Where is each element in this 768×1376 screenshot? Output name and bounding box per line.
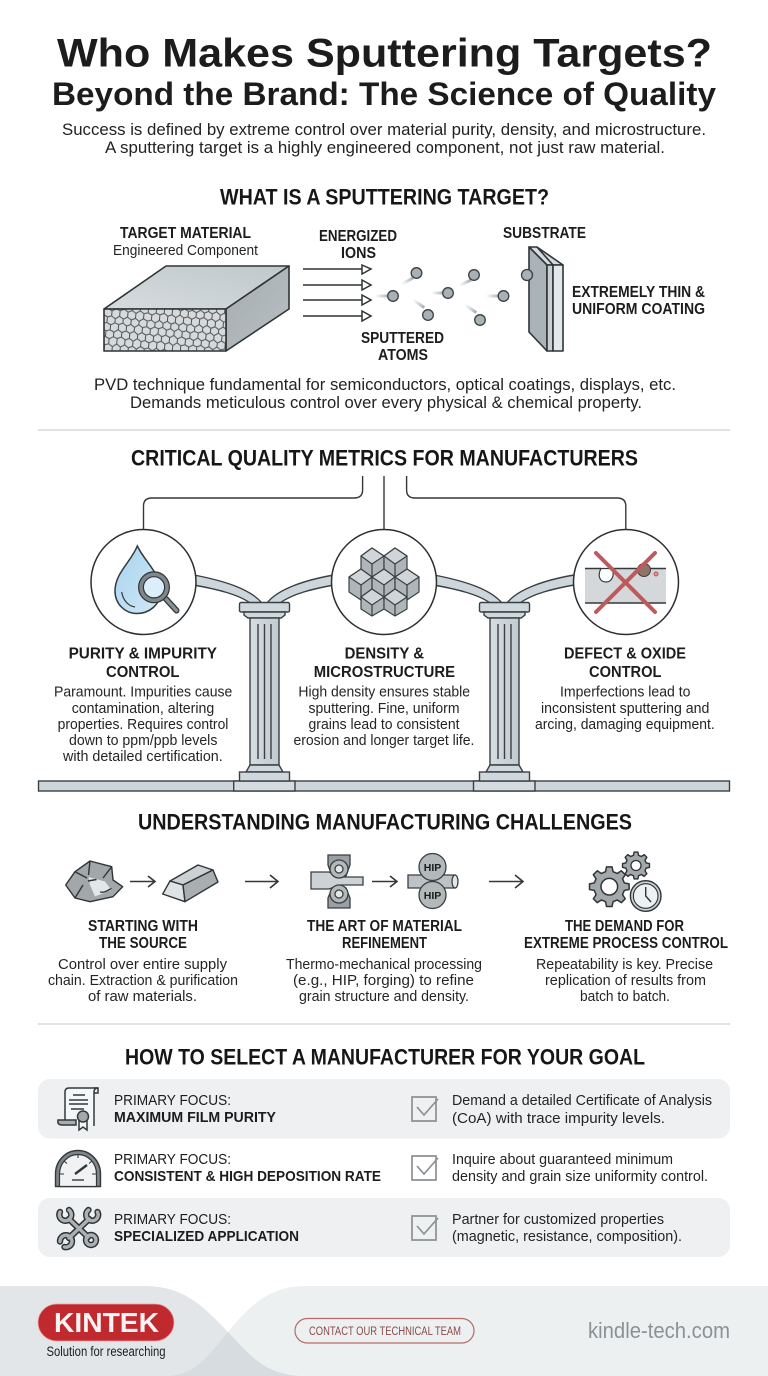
challenge: starting with the source: of raw materials. bbox=[88, 988, 197, 1005]
challenge: material refinement: THE ART OF MATERIAL bbox=[307, 918, 462, 935]
challenge: material refinement: grain structure and density. bbox=[299, 988, 469, 1005]
text: density: grains lead to consistent bbox=[308, 716, 460, 733]
title: Who Makes Sputtering Targets? bbox=[57, 32, 712, 76]
icon: crossed-out defect bbox=[574, 530, 678, 634]
text: defect: Imperfections lead to bbox=[560, 684, 690, 700]
label: PRIMARY FOCUS: bbox=[114, 1151, 231, 1168]
row: consistent and high deposition rate: CONSISTENT & HIGH DEPOSITION RATE bbox=[114, 1168, 381, 1185]
text: purity: with detailed certification. bbox=[62, 748, 223, 765]
text: density: erosion and longer target life. bbox=[294, 732, 474, 749]
row: specialized application: SPECIALIZED APPLICATION bbox=[114, 1228, 299, 1245]
title bbox=[52, 32, 716, 112]
heading: manufacturing challenges: UNDERSTANDING MANUFACTURING CHALLENGES bbox=[138, 810, 632, 834]
icon: checkbox bbox=[412, 1156, 438, 1180]
website: kindle-tech.com bbox=[588, 1318, 730, 1343]
description text bbox=[94, 376, 676, 412]
recommendation: Inquire about guaranteed minimum bbox=[452, 1151, 673, 1168]
row: maximum film purity: (CoA) with trace impurity levels. bbox=[452, 1110, 665, 1127]
label: sputtered atoms: ATOMS bbox=[378, 347, 428, 364]
title: Beyond the Brand: The Science of Quality bbox=[52, 76, 716, 112]
text: purity: Paramount. Impurities cause bbox=[54, 684, 232, 700]
text: defect: DEFECT & OXIDE bbox=[564, 646, 686, 662]
label: energized ions bbox=[319, 228, 397, 262]
label: sputtered atoms bbox=[361, 330, 444, 364]
row: specialized application bbox=[38, 1198, 730, 1257]
icon: gears and clock bbox=[590, 852, 661, 911]
icon: checkbox bbox=[412, 1216, 438, 1240]
heading: critical quality metrics: CRITICAL QUALITY METRICS FOR MANUFACTURERS bbox=[131, 446, 638, 470]
icon: checkbox bbox=[412, 1097, 438, 1121]
connectors bbox=[144, 476, 626, 530]
text: density bbox=[294, 646, 474, 749]
column 1 bbox=[240, 602, 290, 781]
floor bbox=[38, 781, 730, 791]
icon: cube cluster bbox=[332, 530, 436, 634]
metric: density and microstructure bbox=[294, 530, 474, 749]
label: energized ions: IONS bbox=[341, 245, 376, 262]
arrow bbox=[489, 875, 523, 888]
recommendation: Partner for customized properties bbox=[452, 1211, 664, 1228]
text: density: High density ensures stable bbox=[298, 684, 470, 700]
arches bbox=[194, 575, 574, 603]
challenge: material refinement: Thermo-mechanical processing bbox=[286, 956, 482, 973]
label: target material: TARGET MATERIAL bbox=[120, 225, 251, 242]
challenge: process control: Repeatability is key. Precise bbox=[536, 956, 713, 973]
text: defect: CONTROL bbox=[589, 664, 662, 681]
row: consistent and high deposition rate bbox=[56, 1150, 708, 1186]
intro text bbox=[62, 121, 706, 157]
label: coating bbox=[572, 284, 705, 318]
icon: hot isostatic press: HIP bbox=[424, 890, 441, 902]
arrow bbox=[372, 876, 397, 887]
recommendation: Demand a detailed Certificate of Analysis bbox=[452, 1092, 712, 1109]
challenge: starting with the source bbox=[48, 918, 238, 1005]
challenge: process control: EXTREME PROCESS CONTROL bbox=[524, 935, 728, 952]
icon: certificate scroll bbox=[58, 1088, 98, 1130]
contact button: CONTACT OUR TECHNICAL TEAM bbox=[309, 1326, 461, 1338]
label: PRIMARY FOCUS: bbox=[114, 1092, 231, 1109]
logo: Solution for researching bbox=[46, 1344, 166, 1359]
label: target material bbox=[113, 225, 259, 259]
target material block bbox=[104, 266, 289, 351]
text: purity: CONTROL bbox=[106, 664, 180, 681]
text: purity: contamination, altering bbox=[72, 700, 214, 717]
challenge: process control: batch to batch. bbox=[580, 988, 670, 1005]
icon: ingot bbox=[163, 865, 218, 902]
text: purity: properties. Requires control bbox=[58, 716, 228, 733]
challenge: starting with the source: STARTING WITH bbox=[88, 918, 198, 935]
challenge: process control: replication of results from bbox=[545, 972, 706, 989]
label: coating: UNIFORM COATING bbox=[572, 301, 705, 318]
row: specialized application: (magnetic, resistance, composition). bbox=[452, 1228, 682, 1245]
challenge: process control: THE DEMAND FOR bbox=[565, 918, 684, 935]
text: purity bbox=[54, 646, 232, 765]
icon: rolling mill bbox=[311, 855, 363, 908]
logo: KINTEK bbox=[54, 1307, 159, 1338]
arrows: ions bbox=[303, 265, 371, 321]
description text: PVD technique fundamental for semiconductors, optical coatings, displays, etc. bbox=[94, 376, 676, 394]
substrate bbox=[522, 247, 563, 351]
label: target material: Engineered Component bbox=[113, 242, 259, 259]
label: coating: EXTREMELY THIN & bbox=[572, 284, 705, 301]
logo bbox=[38, 1304, 174, 1359]
label: substrate: SUBSTRATE bbox=[503, 225, 586, 242]
row: maximum film purity: MAXIMUM FILM PURITY bbox=[114, 1109, 276, 1126]
text: density: DENSITY & bbox=[345, 646, 424, 662]
heading: what is a sputtering target: WHAT IS A SPUTTERING TARGET? bbox=[220, 184, 549, 210]
intro text: Success is defined by extreme control over material purity, density, and microstructure. bbox=[62, 121, 706, 139]
description text: Demands meticulous control over every physical & chemical property. bbox=[130, 394, 642, 412]
challenge: starting with the source: Control over entire supply bbox=[58, 956, 227, 973]
text: defect bbox=[535, 646, 715, 733]
label: energized ions: ENERGIZED bbox=[319, 228, 397, 245]
column 2 bbox=[480, 602, 530, 781]
sputtered atoms bbox=[375, 268, 509, 325]
contact button bbox=[295, 1318, 474, 1343]
challenge: starting with the source: THE SOURCE bbox=[99, 935, 187, 952]
icon: gauge bbox=[56, 1150, 100, 1186]
heading: how to select a manufacturer: HOW TO SELECT A MANUFACTURER FOR YOUR GOAL bbox=[125, 1044, 645, 1070]
text: purity: down to ppm/ppb levels bbox=[69, 732, 217, 749]
icon: raw ore rock bbox=[66, 861, 123, 902]
challenge: material refinement: (e.g., HIP, forging) to refine bbox=[293, 972, 474, 989]
arches and columns bbox=[38, 575, 730, 791]
text: defect: inconsistent sputtering and bbox=[541, 700, 709, 717]
metric: defect and oxide control bbox=[535, 530, 715, 733]
arrow bbox=[130, 876, 155, 887]
metric: purity and impurity control bbox=[54, 530, 232, 765]
challenge: process control bbox=[524, 918, 728, 1005]
label: PRIMARY FOCUS: bbox=[114, 1211, 231, 1228]
challenge: material refinement: REFINEMENT bbox=[342, 935, 427, 952]
challenge: material refinement bbox=[286, 918, 482, 1005]
text: density: MICROSTRUCTURE bbox=[314, 664, 455, 681]
icon: crossed wrenches bbox=[59, 1210, 98, 1247]
text: density: sputtering. Fine, uniform bbox=[308, 700, 460, 717]
footer background bbox=[0, 1286, 768, 1376]
row: maximum film purity bbox=[38, 1079, 730, 1138]
arrow bbox=[245, 875, 278, 888]
diagram: sputtering process bbox=[104, 225, 705, 364]
row: consistent and high deposition rate: density and grain size uniformity control. bbox=[452, 1168, 708, 1185]
icon: water drop with magnifier bbox=[91, 530, 196, 634]
text: defect: arcing, damaging equipment. bbox=[535, 716, 715, 733]
icon: hot isostatic press bbox=[408, 854, 458, 908]
icon: hot isostatic press: HIP bbox=[424, 862, 441, 874]
intro text: A sputtering target is a highly engineered component, not just raw material. bbox=[105, 139, 665, 157]
text: purity: PURITY & IMPURITY bbox=[69, 646, 217, 662]
challenge: starting with the source: chain. Extraction & purification bbox=[48, 972, 238, 989]
label: sputtered atoms: SPUTTERED bbox=[361, 330, 444, 347]
footer bbox=[0, 1286, 768, 1376]
